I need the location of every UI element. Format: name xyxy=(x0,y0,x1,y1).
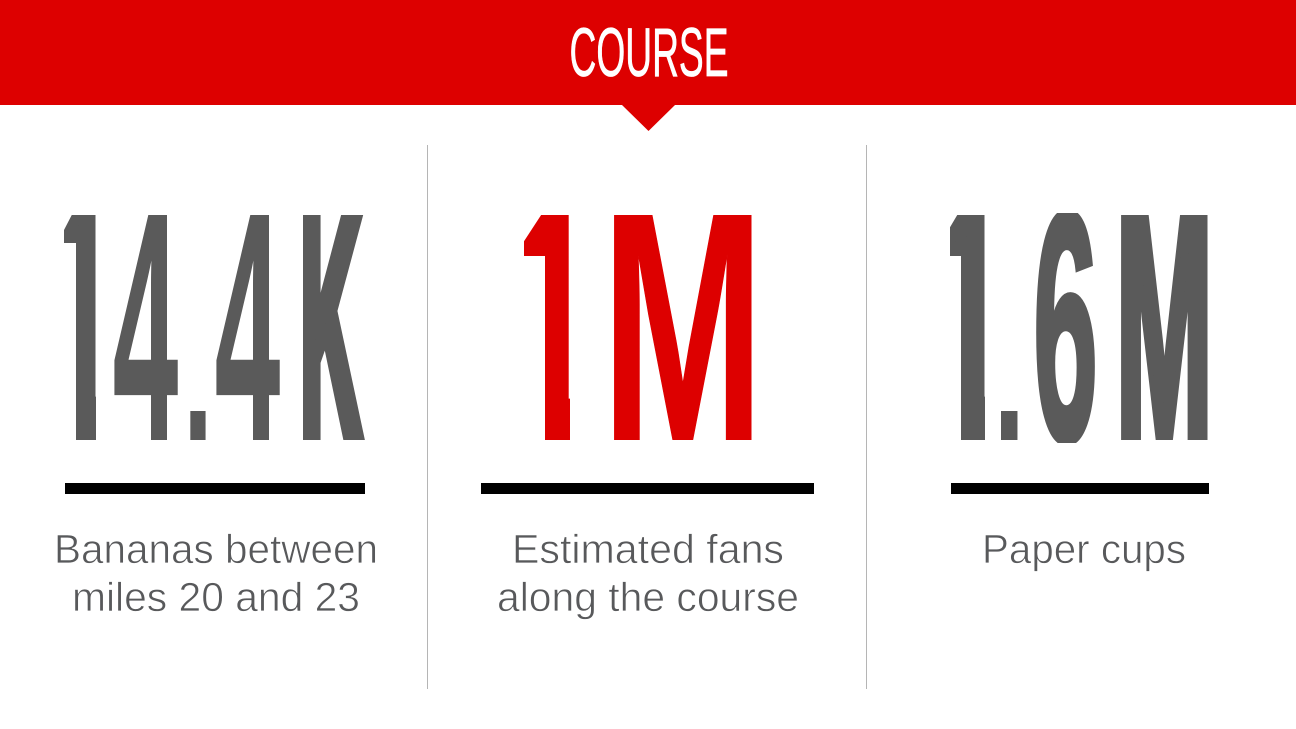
label: bananas xyxy=(54,526,378,620)
label: fans xyxy=(497,526,799,620)
number: 14.4K: 4 xyxy=(215,145,281,510)
label: fans: Estimated fans xyxy=(512,526,784,572)
panel: paper cups xyxy=(950,213,1209,572)
rule xyxy=(65,483,365,494)
label: fans: along the course xyxy=(497,574,799,620)
number: 1.6M: . xyxy=(993,145,1025,510)
label: cups: Paper cups xyxy=(982,526,1186,572)
label: bananas: Bananas between xyxy=(54,526,378,572)
header banner xyxy=(0,0,1296,131)
number: 14.4K: 4 xyxy=(113,145,179,510)
rule xyxy=(481,483,814,494)
number: 1M: M xyxy=(601,145,764,510)
infographic: K xyxy=(300,145,362,510)
panel: fans xyxy=(481,215,814,620)
panel: bananas xyxy=(58,215,375,612)
label: bananas: miles 20 and 23 xyxy=(72,574,360,620)
number: 14.4K: 1 xyxy=(52,145,112,510)
number: 1M: 1 xyxy=(514,145,591,510)
rule xyxy=(951,483,1209,494)
number: 14.4K: . xyxy=(183,145,213,510)
title: COURSE xyxy=(570,14,728,91)
number: 1.6M: 6 xyxy=(1033,145,1098,510)
number: 1.6M: 1 xyxy=(934,145,1004,510)
